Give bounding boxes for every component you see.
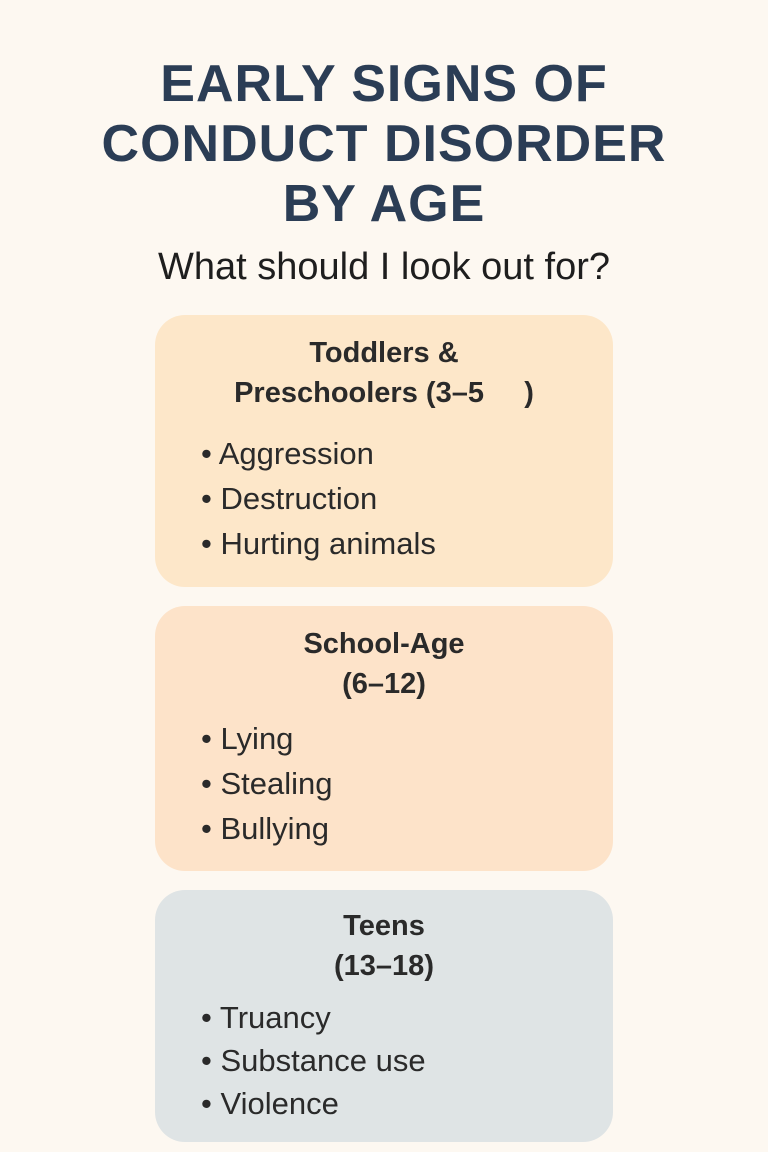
heading: school-age [303, 628, 465, 700]
title [102, 55, 666, 233]
heading: teens: (13–18) [334, 950, 434, 982]
panel: toddlers [155, 315, 613, 587]
list: toddler signs: • Aggression [201, 436, 374, 471]
panel: school-age [155, 606, 613, 871]
list: toddler signs: • Destruction [201, 481, 377, 516]
list: school-age signs [201, 721, 332, 846]
list: teen signs [201, 1000, 426, 1121]
heading: teens [334, 910, 434, 982]
title: BY AGE [283, 175, 485, 233]
list: school-age signs: • Bullying [201, 811, 329, 846]
heading: teens: Teens [343, 910, 425, 942]
subtitle: What should I look out for? [158, 246, 610, 288]
list: teen signs: • Violence [201, 1086, 339, 1121]
list: school-age signs: • Lying [201, 721, 293, 756]
heading: school-age: School-Age [303, 628, 465, 660]
heading: toddlers: Toddlers & [309, 337, 459, 369]
list: school-age signs: • Stealing [201, 766, 332, 801]
panel: teens [155, 890, 613, 1142]
title: EARLY SIGNS OF [160, 55, 608, 113]
list: teen signs: • Truancy [201, 1000, 331, 1035]
heading: toddlers: Preschoolers (3–5 ) [234, 377, 534, 409]
heading: toddlers [234, 337, 534, 409]
heading: school-age: (6–12) [342, 668, 426, 700]
list: teen signs: • Substance use [201, 1043, 426, 1078]
list: toddler signs: • Hurting animals [201, 526, 436, 561]
title: CONDUCT DISORDER [102, 115, 666, 173]
list: toddler signs [201, 436, 436, 561]
